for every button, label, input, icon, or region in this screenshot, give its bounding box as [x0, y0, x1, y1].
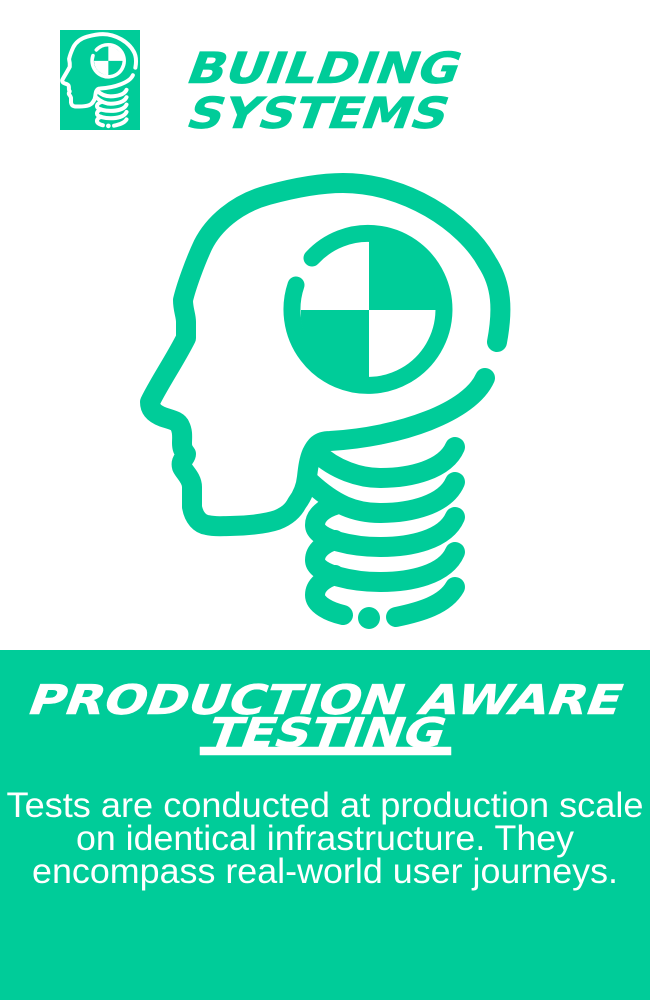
logo wordmark [180, 44, 469, 139]
logo: head icon badge [60, 30, 140, 130]
spring coils [310, 447, 455, 617]
panel body text: Tests are conducted at production scale [6, 786, 644, 825]
main icon: head with crash-test marker and spring [150, 183, 500, 629]
spring dot [358, 607, 380, 629]
panel title [21, 676, 631, 757]
panel body text [6, 786, 644, 891]
crash-test marker [292, 233, 444, 385]
head outline [150, 183, 500, 526]
panel title: PRODUCTION AWARE [21, 676, 631, 724]
panel body text: on identical infrastructure. They [76, 819, 574, 858]
bottom panel [0, 650, 650, 1000]
wordmark line: BUILDING: BUILDING [180, 44, 469, 94]
panel body text: encompass real-world user journeys. [32, 852, 618, 891]
wordmark line: SYSTEMS: SYSTEMS [180, 89, 457, 139]
panel title: TESTING [200, 709, 454, 757]
